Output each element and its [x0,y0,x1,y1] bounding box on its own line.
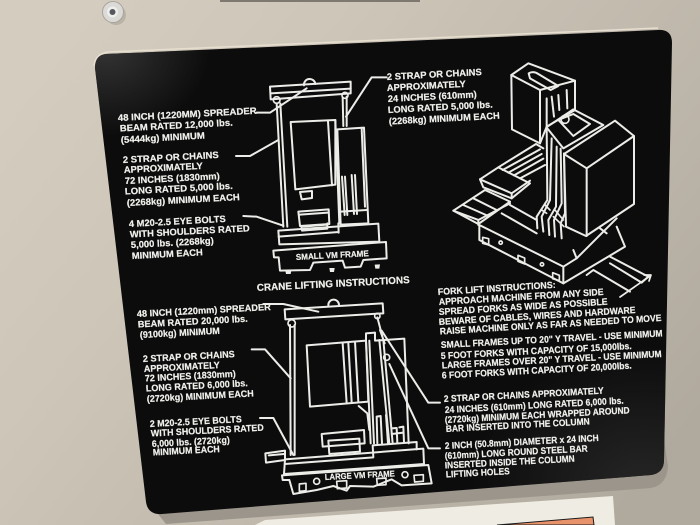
lifting straps [290,317,385,455]
text: steel bar note [445,433,599,479]
text: frame size fork requirements: 5 FOOT FORKS WITH CAPACITY OF 15,000lbs. [441,341,632,361]
text: large frame long strap note: LONG RATED 6,000 lbs. [146,378,248,393]
text: steel bar note: INSERTED INSIDE THE COLUMN [445,454,575,470]
text: small frame spreader beam note: BEAM RATED 12,000 lbs. [120,118,233,133]
text: short strap note large frame [444,386,630,434]
text: short strap note small frame: 2 STRAP OR CHAINS [387,67,482,82]
text: fork lift instructions: FORK LIFT INSTRUCTIONS: [438,280,556,297]
text: small frame long strap note: (2268kg) MINIMUM EACH [127,192,240,208]
rear column [511,63,575,143]
text: steel bar note: 2 INCH (50.8mm) DIAMETER x 24 INCH [445,433,599,451]
text: steel bar note: LIFTING HOLES [446,466,510,479]
text: fork lift instructions [438,280,662,336]
text: fork lift instructions: RAISE MACHINE ONLY AS FAR AS NEEDED TO MOVE [440,313,662,336]
text: large frame eye bolts note: MINIMUM EACH [153,444,220,457]
text: large frame spreader beam note: 48 INCH (1220mm) SPREADER [137,302,271,319]
spindle head housing [547,109,634,236]
plate highlight [94,28,658,66]
text: frame size fork requirements: 6 FOOT FORKS WITH CAPACITY OF 20,000lbs. [442,361,632,380]
text: small frame spreader beam note [118,106,257,145]
text: small frame eye bolts note: WITH SHOULDERS RATED [130,223,250,239]
fork lift prongs [587,257,648,292]
white paper at bottom edge [255,496,615,525]
text: small frame label: SMALL VM FRAME [296,248,369,262]
text: steel bar note: (610mm) LONG ROUND STEEL BAR [445,444,588,461]
spreader beam [285,300,383,327]
text: short strap note small frame: 24 INCHES (610mm) [388,89,477,104]
text: small frame long strap note: 72 INCHES (1830mm) [125,171,220,186]
arrow: fork direction [620,275,651,297]
heading: crane lifting instructions: CRANE LIFTING INSTRUCTIONS [257,275,410,294]
text: fork lift instructions: APPROACH MACHINE FROM ANY SIDE [439,287,604,307]
text: large frame long strap note: APPROXIMATELY [144,360,221,374]
text: large frame eye bolts note [150,414,264,457]
text: small frame long strap note: LONG RATED 5,000 lbs. [125,181,233,196]
callout leader lines [236,77,387,226]
text: fork lift instructions: SPREAD FORKS AS WIDE AS POSSIBLE [439,297,608,317]
text: small frame spreader beam note: 48 INCH (1220MM) SPREADER [118,106,257,123]
text: large frame spreader beam note: (9100kg) MINIMUM [140,326,220,340]
text: short strap note small frame [387,67,500,126]
text: small frame eye bolts note: MINIMUM EACH [132,247,203,261]
text: short strap note large frame: 24 INCHES (610mm) LONG RATED 6,000 lbs. [445,396,624,415]
text: fork lift instructions: BEWARE OF CABLES, WIRES AND HARDWARE [439,305,636,327]
text: frame size fork requirements: SMALL FRAMES UP TO 20" Y TRAVEL - USE MINIMUM [441,328,663,350]
text: small frame spreader beam note: (5444kg) MINIMUM [121,131,205,145]
text: large frame label: LARGE VM FRAME [325,468,395,482]
text: short strap note large frame: 2 STRAP OR CHAINS APPROXIMATELY [444,386,605,404]
text: small frame eye bolts note: 4 M20-2.5 EYE BOLTS [129,214,226,229]
machine body [291,120,368,231]
text: large frame eye bolts note: WITH SHOULDERS RATED [151,423,264,438]
black plate panel [95,30,672,514]
text: large frame long strap note: 2 STRAP OR CHAINS [143,349,235,364]
text: large frame spreader beam note: BEAM RATED 20,000 lbs. [138,314,248,329]
text: short strap note small frame: LONG RATED 5,000 lbs. [388,100,493,115]
text: small frame long strap note: APPROXIMATELY [124,161,204,175]
text: short strap note large frame: BAR INSERTED INTO THE COLUMN [446,416,590,434]
machine base [479,205,625,283]
diagram: small VM frame crane lift [236,77,387,274]
lifting straps [277,97,347,227]
text: large frame eye bolts note: 2 M20-2.5 EYE BOLTS [150,414,242,429]
text: short strap note large frame: (2720kg) MINIMUM EACH WRAPPED AROUND [445,405,630,425]
icon: mounting screw [102,2,126,25]
diagram: isometric machine [453,63,648,292]
machine body [307,333,409,454]
machine base [273,223,387,274]
text: frame size fork requirements [441,328,663,380]
text: short strap note small frame: APPROXIMATELY [387,79,467,93]
machine base [265,442,432,494]
text: small frame eye bolts note: 5,000 lbs. (2268kg) [131,236,214,250]
text: large frame long strap note [143,349,254,404]
callout leader lines [252,304,440,455]
text: small frame eye bolts note [129,214,250,261]
plate shadow [150,440,668,524]
text: large frame eye bolts note: 6,000 lbs. (2720kg) [152,435,230,449]
text: small frame long strap note [123,150,240,208]
text: short strap note small frame: (2268kg) MINIMUM EACH [389,111,500,126]
text: large frame long strap note: (2720kg) MINIMUM EACH [147,388,254,404]
spreader beam [270,79,351,103]
text: large frame spreader beam note [137,302,271,340]
text: large frame long strap note: 72 INCHES (1830mm) [145,369,236,383]
diagram: large VM frame crane lift [252,300,440,494]
table and saddle [453,144,545,225]
text: frame size fork requirements: LARGE FRAMES OVER 20" Y TRAVEL - USE MINIMUM [442,349,662,370]
text: small frame long strap note: 2 STRAP OR CHAINS [123,150,219,165]
cable bundle [537,128,565,238]
